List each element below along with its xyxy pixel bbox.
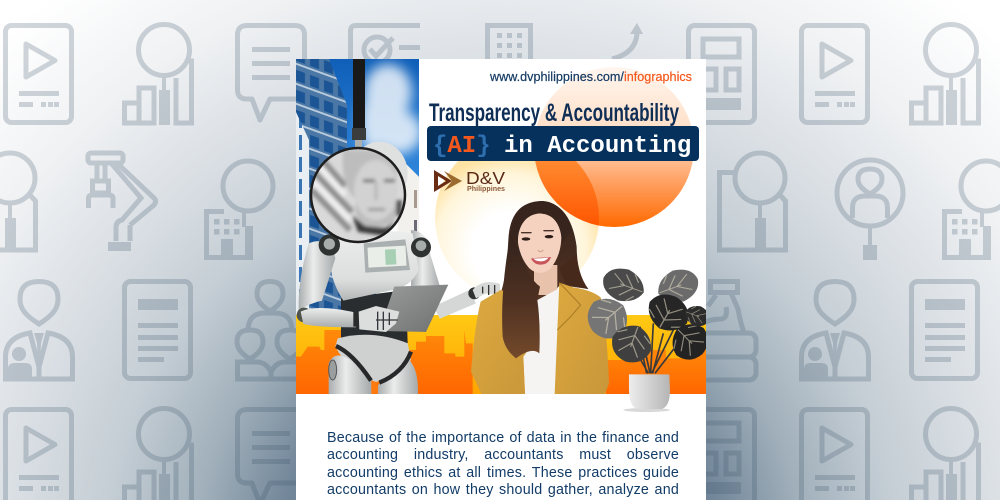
robot right upper arm	[411, 230, 440, 286]
robot left upper arm	[299, 241, 335, 311]
intro paragraph: Because of the importance of data in the finance and	[327, 430, 679, 446]
icon: video document right	[802, 26, 868, 122]
woman white shirt	[523, 288, 560, 394]
robot waist	[341, 290, 408, 343]
magnifier handle	[352, 59, 366, 150]
woman front hair	[502, 233, 540, 358]
decorative yellow circle	[435, 161, 599, 296]
robot thigh right	[378, 360, 418, 394]
intro paragraph: accounting industry, accountants must observe	[327, 447, 679, 463]
white foreground building	[296, 112, 309, 320]
magnifying glass	[310, 59, 406, 243]
potted monstera plant	[579, 262, 716, 412]
icon: magnifier building	[206, 161, 273, 260]
robot knee disc	[329, 360, 337, 380]
monstera leaf large left	[579, 289, 637, 347]
website url: www.dvphilippines.com/infographics	[489, 69, 692, 84]
icon: video document bottom	[6, 410, 72, 500]
icon: form layout	[688, 26, 754, 122]
plant stems	[633, 323, 683, 373]
monstera leaf lower right	[664, 315, 716, 368]
woman neck	[534, 265, 557, 295]
icon: text document right	[912, 282, 978, 378]
woman back hair	[502, 201, 588, 301]
icon: magnifier building right edge	[944, 161, 1000, 260]
monstera leaf center dark	[641, 287, 696, 339]
robot torso	[331, 231, 419, 301]
icon: magnifier document right	[720, 153, 786, 251]
intro paragraph: accountants on how they should gather, analyze and	[327, 482, 679, 498]
title banner	[427, 126, 699, 161]
robot thigh left	[329, 355, 371, 394]
icon: hand and stacked books	[682, 282, 756, 380]
icon: video document bottom right	[802, 410, 868, 500]
woman in mustard blazer	[471, 201, 609, 394]
title line one: Transparency & Accountability	[429, 99, 679, 127]
icon: speech bubble bottom	[238, 410, 304, 500]
icon: group of people	[237, 282, 304, 379]
robot forearm to shoulder	[433, 290, 476, 319]
magnifier rim	[311, 148, 405, 242]
robot head shell	[363, 142, 408, 186]
icon: checklist magnifier	[350, 26, 420, 122]
woman blazer right	[555, 283, 609, 394]
woman right shoulder hair	[568, 254, 588, 289]
icon: robotic arm	[88, 153, 156, 251]
icon: growth arrow	[612, 23, 643, 59]
icon: magnifier chart bottom right	[912, 408, 978, 500]
glass office tower	[296, 59, 347, 320]
blurred robot face in lens	[310, 147, 406, 243]
banner text: in Accounting	[504, 133, 691, 160]
yellow horizon band	[296, 315, 706, 394]
icon: business person	[6, 282, 72, 379]
orange city skyline	[296, 330, 706, 394]
sky with clouds	[329, 59, 419, 295]
monstera leaf lower left	[606, 319, 657, 368]
monstera leaf top right	[653, 264, 703, 309]
logo text: D&V	[466, 168, 505, 188]
icon: magnifier chart bottom	[124, 408, 192, 500]
woman smile	[531, 257, 551, 265]
plant pot	[629, 374, 670, 409]
icon: text document	[124, 282, 190, 378]
logo subtitle: Philippines	[467, 186, 505, 193]
pot shadow	[623, 408, 670, 412]
robot tablet	[387, 284, 448, 332]
monstera leaf right edge	[682, 302, 712, 330]
icon: person in magnifier	[837, 160, 903, 260]
woman blazer left	[471, 290, 526, 394]
decorative orange circle	[535, 67, 693, 227]
robot chest screen	[364, 239, 410, 273]
D&V Philippines logo	[434, 168, 505, 193]
icon: speech bubble	[238, 26, 304, 120]
woman fringe hair	[511, 201, 572, 243]
icon: magnifier chart right	[912, 24, 978, 125]
robot hand on shoulder	[468, 282, 500, 299]
robot hip joints	[336, 346, 411, 383]
white building right	[398, 164, 419, 233]
robot	[297, 142, 500, 394]
woman blazer lapel	[557, 283, 581, 330]
icon: business person right	[802, 282, 868, 379]
robot forearm holding tablet	[297, 308, 359, 327]
banner text: {AI}	[433, 133, 491, 160]
robot hand	[359, 306, 399, 332]
icon: form layout bottom	[688, 410, 754, 500]
woman face	[517, 213, 561, 273]
woman nose	[538, 250, 543, 252]
woman eyes and brows	[521, 230, 554, 241]
icon: magnifier document left edge	[0, 153, 36, 251]
panel: infographic page	[296, 59, 716, 500]
icon: video document	[6, 26, 72, 122]
logo mark	[434, 170, 462, 192]
icon: office grid building	[488, 26, 530, 122]
robot hips	[335, 335, 411, 382]
intro paragraph	[327, 430, 679, 498]
robot shoulder joints	[319, 234, 431, 257]
icon: magnifier over bar chart	[124, 24, 192, 125]
intro paragraph: accounting ethics at all times. These practices guide	[327, 465, 679, 481]
monstera leaf top left	[598, 262, 649, 308]
